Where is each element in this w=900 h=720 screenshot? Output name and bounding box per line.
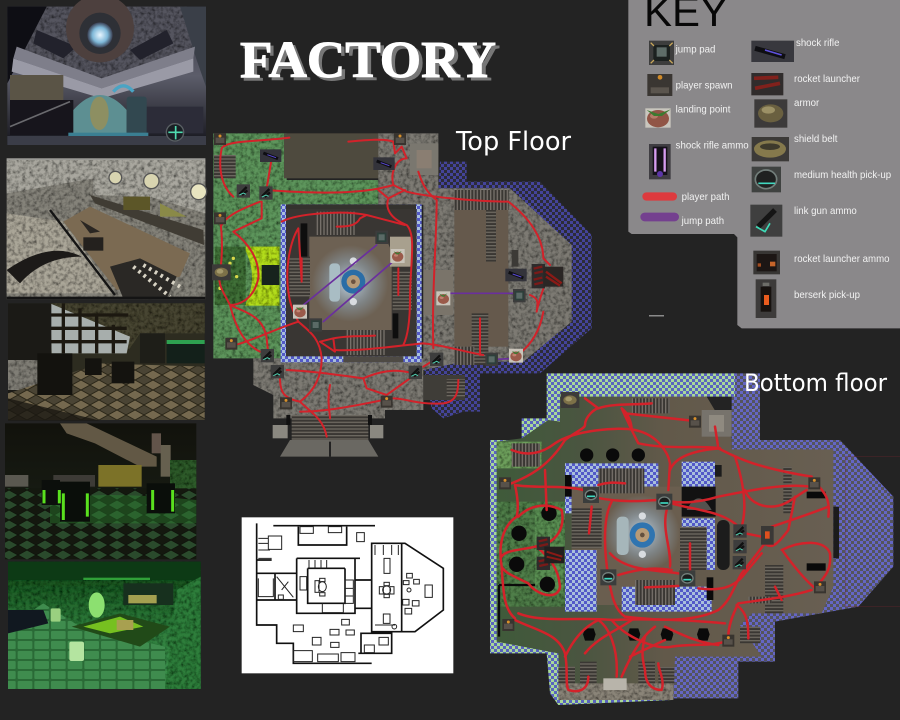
paths: player [219,138,550,437]
central floor [572,487,682,605]
key item: jump pad: jump pad [675,45,715,56]
checker backing [423,162,592,418]
dark alcove [682,487,716,517]
floor [497,397,833,698]
key item: landing point [645,105,731,128]
photo: green tanks under pipe [5,423,196,559]
right hall [454,210,508,347]
lower stairs exit [292,415,368,440]
key item: shield belt: shield belt [794,134,838,145]
key item: shock rifle [751,38,839,62]
key item: jump pad [649,41,715,65]
panel: bottom floor map [490,373,900,705]
key item: landing point: landing point [676,105,731,116]
central block [281,204,422,362]
checker backing right [672,373,893,698]
small dash mark [649,315,664,316]
key item: link gun ammo: link gun ammo [794,206,857,217]
panel: key [628,0,900,328]
key item: medium health pick-up [752,167,891,192]
key item: player spawn: player spawn [676,81,733,92]
key item: rocket launcher: rocket launcher [794,74,861,85]
legend: jump path: jump path [681,216,724,227]
key item: shock rifle ammo: shock rifle ammo [676,141,749,152]
pickups: bottom floor [499,392,826,647]
paths: player [500,398,830,691]
key item: berserk pick-up: berserk pick-up [794,290,860,301]
heading: top floor: Top Floor [455,127,571,157]
green wing [213,133,378,358]
stairs [512,398,792,690]
key item: armor [754,98,820,128]
photo: green room [8,562,201,689]
key item: shock rifle: shock rifle [796,38,839,49]
paths: jump [303,245,520,359]
key item: rocket launcher ammo: rocket launcher ammo [794,254,890,265]
panel: screenshot column [5,0,207,689]
pickups: top floor [212,133,563,409]
legend: jump path [640,213,724,227]
legend: player path [642,192,729,203]
photo: stone room [7,158,207,299]
panel: top floor map [212,133,592,457]
key item: berserk pick-up [756,279,860,318]
left stairs [214,155,236,178]
key item: link gun ammo [750,205,857,237]
key item: player spawn [647,74,733,96]
key item: shield belt [752,134,838,161]
central checker walls [565,463,658,487]
yellow-green pool [243,247,279,306]
panel: hand sketch [242,517,453,673]
outline marker [845,457,900,607]
title: FACTORY [240,32,496,89]
key item: armor: armor [794,98,820,109]
photo: window hall [8,303,205,421]
key item: shock rifle ammo [649,141,749,179]
title: FACTORY [243,35,500,92]
photo: reactor chamber [7,0,206,145]
heading: bottom floor: Bottom floor [744,369,887,397]
stone sections [253,133,572,418]
checker backing left [490,373,735,705]
bright green room [497,442,542,468]
legend: player path: player path [682,192,729,203]
black wells [499,448,839,641]
key item: rocket launcher ammo [753,251,890,274]
central machine [329,257,365,305]
key item: rocket launcher [751,73,861,95]
key item: medium health pick-up: medium health pick-up [794,170,891,181]
upper brown room [284,133,379,178]
central machine [617,512,655,558]
